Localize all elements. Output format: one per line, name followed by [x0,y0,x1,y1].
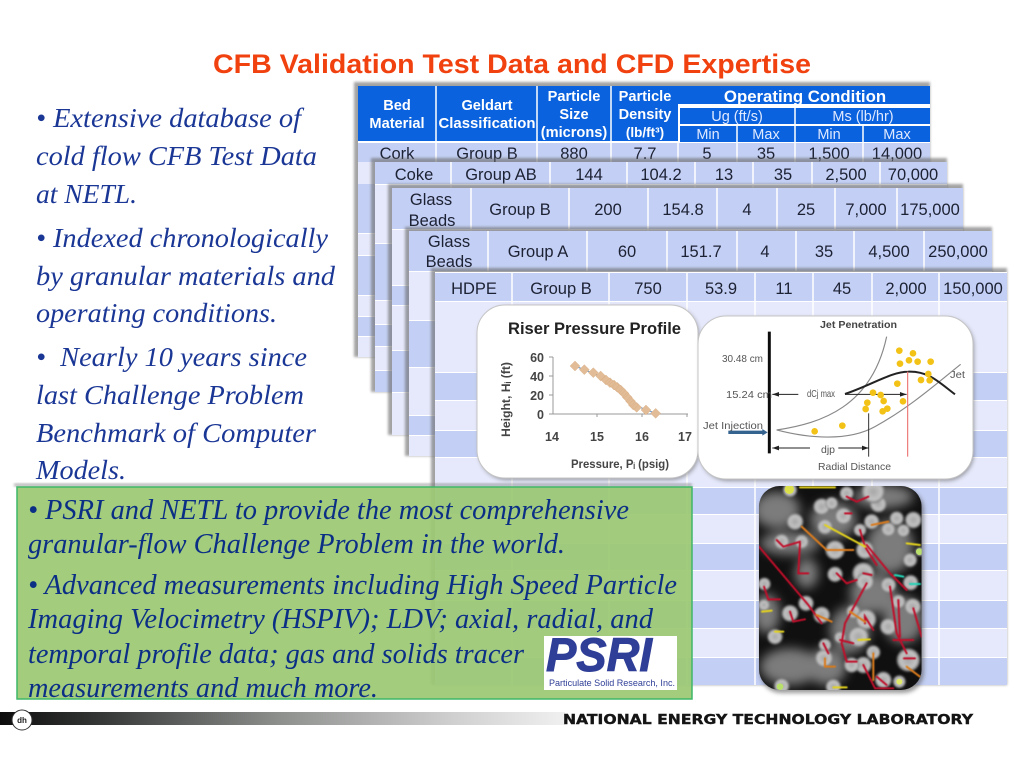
table: glass beads group A: Group A [508,243,568,261]
table: HDPE: 750 [634,280,662,298]
panel: PSRI and NETL green callout: granular-flow Challenge Problem in the world. [28,529,565,560]
table: cork: Min [817,127,841,143]
chart: riser pressure profile: 15 [590,430,604,444]
diagram: jet penetration: 30.48 cm [722,353,763,365]
chart: riser pressure profile [477,305,699,480]
diagram: jet penetration [698,316,974,481]
table: HDPE [431,268,1007,685]
table: glass beads group A [405,227,992,456]
table: cork [354,82,930,357]
table: coke: 144 [575,166,603,184]
diagram: jet penetration: djp [821,444,835,456]
text block: database bullets: at NETL. [36,179,137,209]
icon: page number badge [12,710,32,730]
table: glass beads group B: 200 [594,201,622,219]
table: cork: (lb/ft³) [626,125,664,140]
table: glass beads group B: 175,000 [900,201,960,219]
table: cork: Particle [548,89,600,105]
panel: PSRI and NETL green callout: • Advanced measurements including High Speed Particle [28,570,677,601]
chart: riser pressure profile: 60 [530,351,544,365]
table: coke: Group AB [465,166,537,184]
table: cork: Min [696,127,720,143]
footer bar [0,712,565,725]
text block: database bullets: Models. [35,455,126,485]
panel: PSRI and NETL green callout: • PSRI and NETL to provide the most comprehensive [28,495,629,526]
table: glass beads group B: Group B [489,201,551,219]
table: cork: Ug (ft/s) [711,109,763,125]
text block: database bullets: • Nearly 10 years since [36,342,307,372]
text block: database bullets: operating conditions. [36,298,277,328]
table: glass beads group B: 25 [797,201,815,219]
table: HDPE: HDPE [451,280,497,298]
table: cork: Particle [619,89,671,105]
table: glass beads group B: 7,000 [845,201,887,219]
table: glass beads group A: 250,000 [928,243,988,261]
table: cork: 1,500 [808,145,850,163]
panel: PSRI and NETL green callout: temporal profile data; gas and solids tracer [28,639,524,670]
table: cork: Max [883,127,911,143]
table: cork: Material [369,116,425,132]
table: coke: 13 [715,166,733,184]
table: glass beads group A: Glass [428,233,470,251]
logo: PSRI: Particulate Solid Research, Inc. [549,678,675,689]
table: glass beads group A: 60 [618,243,636,261]
table: HDPE: 53.9 [705,280,737,298]
table: coke: 2,500 [825,166,867,184]
diagram: jet penetration: Radial Distance [818,461,891,473]
photo: particle imaging velocimetry [753,480,924,694]
table: coke: 35 [774,166,792,184]
text block: database bullets: Benchmark of Computer [36,418,317,448]
table: glass beads group B [388,184,963,435]
text block: database bullets: • Extensive database of [36,103,305,133]
chart: riser pressure profile: 20 [530,389,544,403]
panel: PSRI and NETL green callout [14,483,692,704]
chart: riser pressure profile: Riser Pressure Profile [508,320,681,338]
table: cork: Bed [383,98,411,114]
table: cork: 7.7 [634,145,656,163]
chart: riser pressure profile: Pressure, Pᵢ (psig) [571,457,669,471]
table: glass beads group A: 151.7 [680,243,722,261]
table: glass beads group B: Beads [409,212,455,230]
table: HDPE: Group B [530,280,592,298]
diagram: jet penetration: 15.24 cm [726,389,772,401]
logo: PSRI: PSRI [546,628,653,681]
table: coke: Coke [395,166,433,184]
table: cork: (microns) [541,125,607,141]
chart: riser pressure profile: 14 [545,430,559,444]
panel: PSRI and NETL green callout: Imaging Velocimetry (HSPIV); LDV; axial, radial, and [27,604,654,635]
table: glass beads group A: 35 [815,243,833,261]
table: glass beads group A: 4,500 [868,243,910,261]
table: cork: 14,000 [872,145,922,163]
diagram: jet penetration: Jet Injection [703,420,763,432]
diagram: jet penetration: Jet [950,369,965,381]
table: HDPE: 11 [775,280,793,298]
table: glass beads group A: 4 [760,243,770,261]
table: coke: 70,000 [888,166,938,184]
table: glass beads group B: Glass [410,191,452,209]
table: glass beads group B: 4 [742,201,752,219]
table: cork: 880 [560,145,588,163]
text block: database bullets: by granular materials and [36,261,336,291]
table: cork: 35 [757,145,775,163]
table: coke: 104.2 [640,166,682,184]
text block: database bullets [35,103,336,485]
footer: laboratory name: NATIONAL ENERGY TECHNOLOGY LABORATORY [563,712,973,728]
diagram: jet penetration: dCj max [807,388,836,400]
icon: page number badge: dh [17,716,27,725]
table: cork: Max [752,127,780,143]
table: glass beads group B: 154.8 [662,201,704,219]
table: HDPE: 2,000 [885,280,927,298]
table: cork: Cork [380,145,415,163]
table: cork: Classification [438,116,536,132]
chart: riser pressure profile: Height, Hᵢ (ft) [499,362,513,437]
table: cork: Group B [456,145,518,163]
table: HDPE: 150,000 [943,280,1003,298]
title: CFB Validation Test Data and CFD Expertise [213,49,811,79]
chart: riser pressure profile: 16 [635,430,649,444]
table: cork: Size [559,107,589,123]
chart: riser pressure profile: 0 [537,408,544,422]
panel: PSRI and NETL green callout: measurements and much more. [28,673,378,704]
table: cork: 5 [702,145,712,163]
diagram: jet penetration: Jet Penetration [820,319,897,331]
table: HDPE: 45 [833,280,851,298]
table: glass beads group A: Beads [426,253,472,271]
table: cork: Operating Condition [724,87,886,106]
text block: database bullets: • Indexed chronologically [36,223,328,253]
chart: riser pressure profile: 40 [530,370,544,384]
table: cork: Geldart [461,98,513,114]
chart: riser pressure profile: 17 [678,430,692,444]
text block: database bullets: last Challenge Problem [36,380,304,410]
table: coke [371,158,947,392]
table: cork: Ms (lb/hr) [832,109,894,125]
text block: database bullets: cold flow CFB Test Data [36,141,317,171]
table: cork: Density [619,107,672,123]
